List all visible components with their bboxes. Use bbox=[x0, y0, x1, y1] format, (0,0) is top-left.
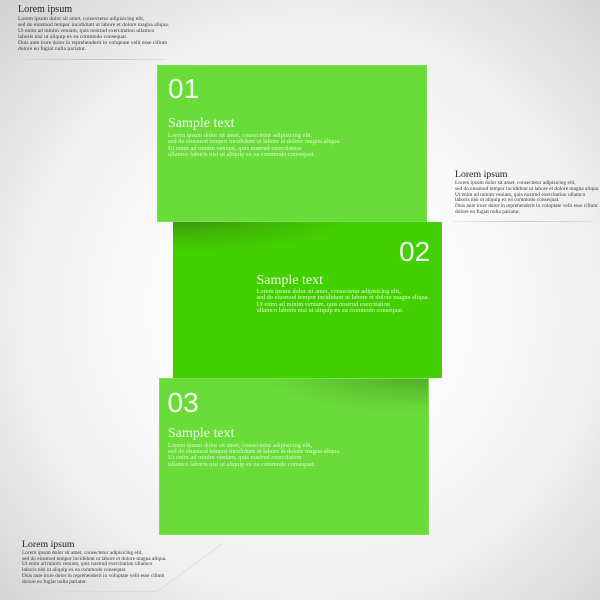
callout text: laboris nisi ut aliquip ex ea commodo consequat. bbox=[18, 34, 127, 40]
panel 01 text: sed do eiusmod tempor incididunt ut labore et dolore magna aliqua. bbox=[168, 138, 341, 145]
panel 03 text: ullamco laboris nisi ut aliquip ex ea commodo consequat. bbox=[168, 461, 315, 468]
callout: bottom left bbox=[22, 539, 222, 592]
number 02: 02 bbox=[399, 236, 430, 266]
panel 02 bbox=[172, 222, 442, 378]
number 01: 01 bbox=[168, 72, 199, 104]
panel 03 text: Ut enim ad minim veniam, quis nostrud exercitation bbox=[168, 454, 301, 461]
callout heading: Lorem ipsum bbox=[455, 169, 508, 180]
panel 01 text: ullamco laboris nisi ut aliquip ex ea commodo consequat. bbox=[168, 151, 315, 158]
callout: top left bbox=[18, 4, 169, 60]
callout text: Duis aute irure dolor in reprehenderit in voluptate velit esse cillum bbox=[18, 40, 167, 46]
callout text: Ut enim ad minim veniam, quis nostrud exercitation ullamco bbox=[455, 192, 585, 198]
panel 02 text: Ut enim ad minim veniam, quis nostrud exercitation bbox=[256, 301, 390, 308]
callout text: Ut enim ad minim veniam, quis nostrud exercitation ullamco bbox=[22, 561, 152, 567]
callout text: laboris nisi ut aliquip ex ea commodo consequat. bbox=[22, 567, 126, 573]
panel 02 text: Lorem ipsum dolor sit amet, consectetur adipisicing elit, bbox=[256, 288, 401, 295]
callout text bbox=[22, 550, 166, 585]
panel 01 heading: Sample text bbox=[168, 116, 234, 131]
callout text: Lorem ipsum dolor sit amet, consectetur adipisicing elit, bbox=[18, 16, 144, 22]
callout text: sed do eiusmod tempor incididunt ut labore et dolore magna aliqua. bbox=[18, 22, 169, 28]
panel 03 heading: Sample text bbox=[168, 426, 234, 441]
callout: right bbox=[452, 169, 599, 222]
leader line bbox=[90, 544, 222, 592]
panel 01 text: Ut enim ad minim veniam, quis nostrud exercitation bbox=[168, 145, 301, 152]
callout heading: Lorem ipsum bbox=[22, 539, 75, 550]
callout text: laboris nisi ut aliquip ex ea commodo consequat. bbox=[455, 197, 559, 203]
callout text bbox=[455, 180, 599, 215]
callout text: dolore eu fugiat nulla pariatur. bbox=[22, 579, 87, 585]
panel 03 text: sed do eiusmod tempor incididunt ut labore et dolore magna aliqua. bbox=[168, 448, 341, 455]
callout text bbox=[18, 16, 169, 52]
panel 02 text: sed do eiusmod tempor incididunt ut labore et dolore magna aliqua. bbox=[256, 294, 429, 301]
panel 03 bbox=[159, 378, 428, 534]
callout text: Lorem ipsum dolor sit amet, consectetur adipisicing elit, bbox=[455, 180, 576, 186]
panel 01 text: Lorem ipsum dolor sit amet, consectetur adipisicing elit, bbox=[168, 132, 312, 139]
panel 01 bbox=[157, 65, 426, 222]
callout text: sed do eiusmod tempor incididunt ut labore et dolore magna aliqua. bbox=[22, 556, 166, 562]
callout text: Duis aute irure dolor in reprehenderit in voluptate velit esse cillum bbox=[455, 203, 597, 209]
callout text: dolore eu fugiat nulla pariatur. bbox=[455, 209, 520, 215]
callout text: Ut enim ad minim veniam, quis nostrud exercitation ullamco bbox=[18, 28, 154, 34]
callout text: Duis aute irure dolor in reprehenderit in voluptate velit esse cillum bbox=[22, 573, 164, 579]
callout text: Lorem ipsum dolor sit amet, consectetur adipisicing elit, bbox=[22, 550, 143, 556]
number 03: 03 bbox=[168, 387, 199, 418]
callout heading: Lorem ipsum bbox=[18, 4, 72, 14]
panel 02 text bbox=[256, 288, 429, 314]
panel 03 text: Lorem ipsum dolor sit amet, consectetur adipisicing elit, bbox=[168, 442, 312, 448]
panel 02 text: ullamco laboris nisi ut aliquip ex ea commodo consequat. bbox=[256, 307, 404, 314]
callout text: sed do eiusmod tempor incididunt ut labore et dolore magna aliqua. bbox=[455, 186, 599, 192]
callout text: dolore eu fugiat nulla pariatur. bbox=[18, 46, 86, 52]
panel 03 text bbox=[168, 442, 341, 468]
panel 02 heading: Sample text bbox=[256, 272, 323, 288]
panel 01 text bbox=[168, 132, 341, 158]
